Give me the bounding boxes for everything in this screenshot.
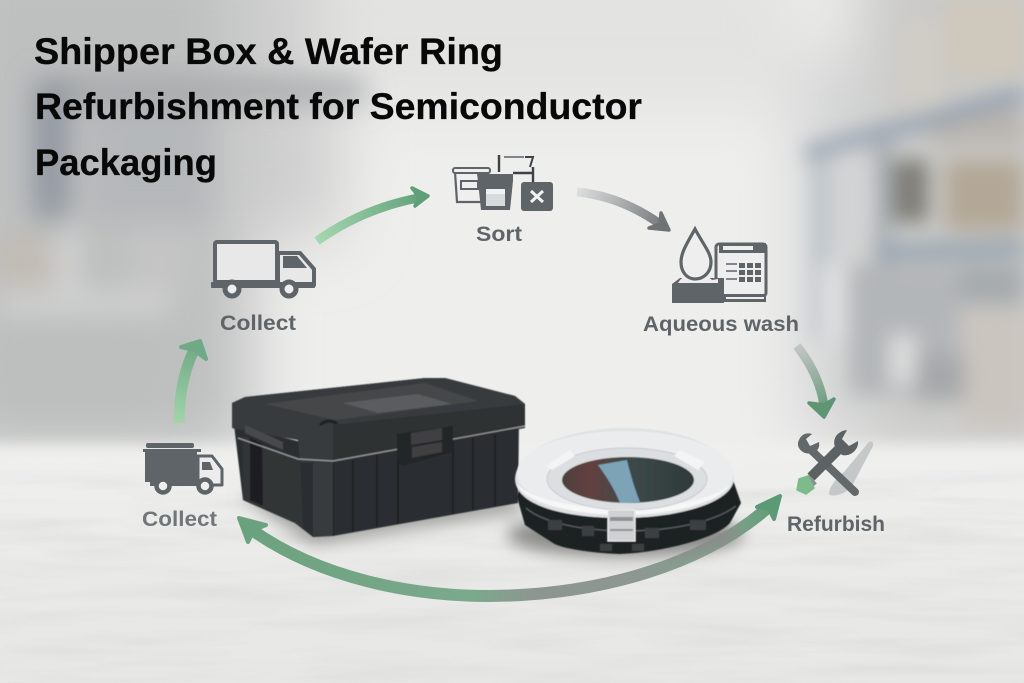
- arrow: sort to aqueous wash: [577, 192, 669, 230]
- product shadows: [240, 495, 743, 557]
- seam line: [238, 426, 525, 461]
- step: aqueous wash: [643, 229, 799, 336]
- title: [34, 31, 642, 183]
- step: sort: [453, 155, 553, 246]
- icon: wrench, screwdriver, brush: [797, 430, 873, 496]
- title: Packaging: [35, 142, 217, 183]
- shipper box: [232, 378, 525, 537]
- label: refurbish: Refurbish: [787, 513, 885, 536]
- arrow: refurbish to collect, large lower curve: [239, 496, 780, 596]
- icon: sort bins: [453, 155, 553, 211]
- label: collect: Collect: [220, 312, 296, 335]
- label: sort: Sort: [476, 223, 522, 246]
- icon: water drop and wash machine: [672, 229, 766, 303]
- label: aqueous wash: Aqueous wash: [643, 313, 799, 336]
- arrow: collect to sort: [317, 188, 428, 241]
- clear ring: [515, 428, 734, 518]
- title: Refurbishment for Semiconductor: [35, 86, 642, 127]
- icon: truck: [211, 242, 315, 296]
- icon: delivery truck: [143, 443, 222, 492]
- black base: [517, 467, 741, 554]
- wafer ring: [515, 428, 741, 554]
- arrow: collect to collect: [179, 341, 206, 423]
- box body: [234, 420, 519, 537]
- step: truck, collect top: [211, 242, 315, 335]
- step: truck, collect bottom: [142, 443, 222, 531]
- wafer disc: [562, 457, 694, 503]
- label: collect: Collect: [142, 508, 217, 531]
- arrow: aqueous wash to refurbish: [797, 346, 834, 417]
- box lid: [232, 378, 525, 463]
- step: refurbish: [787, 430, 885, 536]
- ring clip: [608, 510, 635, 541]
- box latch: [397, 426, 453, 466]
- title: Shipper Box & Wafer Ring: [34, 31, 503, 72]
